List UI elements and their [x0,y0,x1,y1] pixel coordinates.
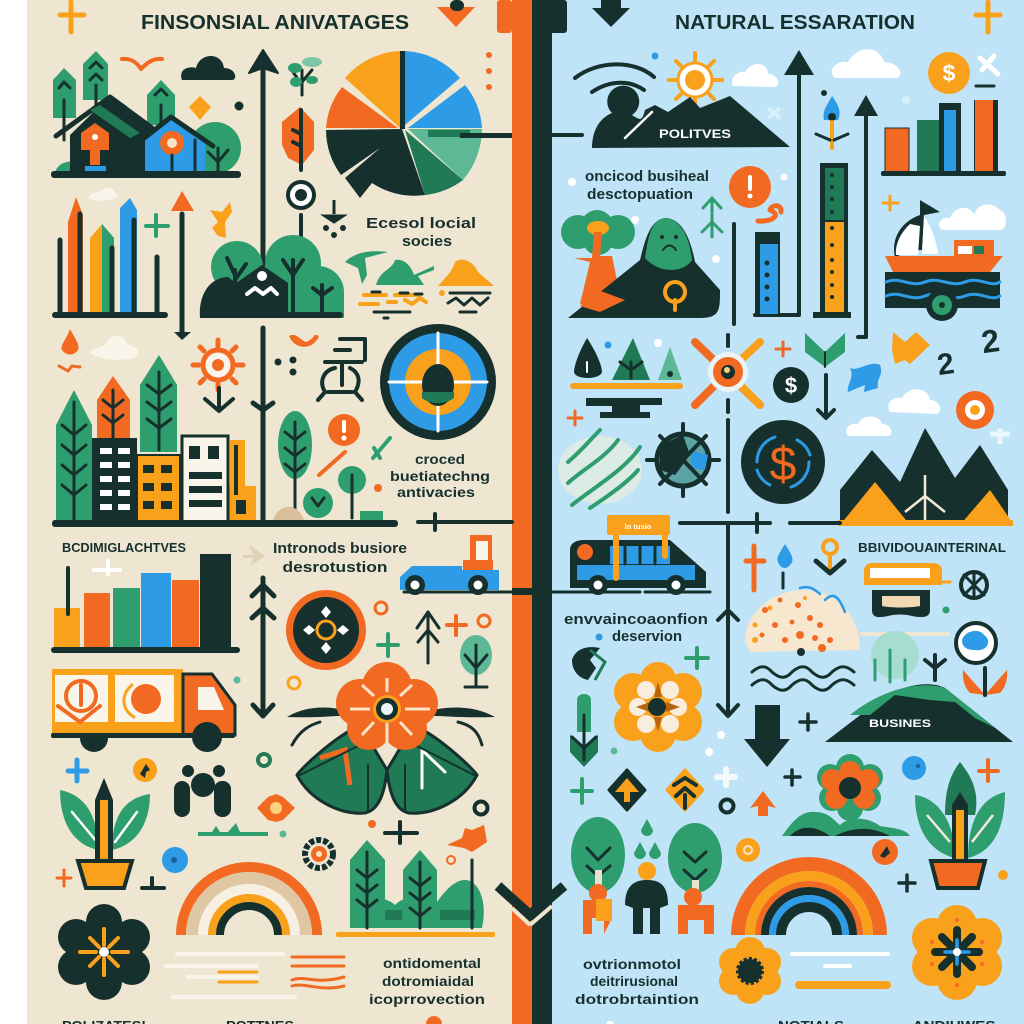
icon: percent coin [773,367,809,403]
icon: amber plus small [883,196,898,210]
dots [610,731,725,756]
text: envvaincoaonfion deservion: deservion [612,628,682,645]
icon: dark plus [800,714,816,730]
icon: mountains turbine [838,428,1014,526]
text: ecesol locial socies: Ecesol locial [366,215,476,232]
dot [652,52,658,60]
arrow: vertical double [252,578,274,716]
icon: orange plus [776,342,790,356]
icon: green grass [198,823,268,836]
icon: ghost tree [871,631,919,682]
icon: dollar coin [928,52,970,94]
icon: small trees [273,466,383,520]
title: natural essaration: NATURAL ESSARATION [675,12,915,34]
icon: orange coin [872,839,898,865]
central divider [497,0,567,1024]
icon: green chevron leaves [805,333,845,367]
icon: delivery truck [51,669,235,752]
arrow: orange top [437,0,475,27]
text: croced buetiatechng antivacies: croced [415,451,465,467]
icon: goggles [864,563,950,617]
dot [280,830,286,838]
dot [780,174,788,180]
arrow: tall up [755,50,814,315]
text: croced buetiatechng antivacies: antivacies [397,484,475,500]
icon: green tree [460,635,492,687]
text: ovtrionmotol deitrirusional dotrobrtaintion: deitrirusional [590,973,678,989]
icon: dark sprout [925,655,945,680]
icon: towers [755,163,851,318]
text: envvaincoaonfion deservion: envvaincoaonfion [564,611,708,628]
text: ontidomental detromiaidal icoprovection [369,955,485,1007]
icon: dome with dots [745,587,950,690]
panel: houses and trees [51,51,241,178]
icon: green ring [258,754,270,766]
dot [606,1021,614,1024]
icon: white cross [980,56,998,74]
icon: number twos: 2 [935,347,956,382]
arrow: second up [854,95,878,337]
arrow: long divider line [253,328,273,520]
icon: potted plant left [60,778,150,888]
icon: green plus [686,648,708,668]
icon: green arrow leaf [570,694,598,767]
line [732,224,736,324]
icon: dollar coin: $ [943,60,956,86]
icon: alert circle [328,414,360,446]
arrow: green up [702,198,722,237]
dot [998,870,1008,880]
icon: magnifier tulip [956,623,1007,695]
panel: forest hut [200,235,344,318]
arrow: long up [249,50,278,265]
dot [942,606,950,614]
icon: number twos [935,322,1002,382]
icon: orange x sun [695,335,760,412]
icon: wheel [961,572,987,598]
icon: mountain business: BUSINES [869,718,931,730]
dots [274,356,296,376]
icon: globe target [380,324,496,440]
icon: mountain business [825,684,1013,742]
icon: sailboat on water [885,200,1006,321]
icons: land and water strip [345,251,494,318]
text: ovtrionmotol deitrirusional dotrobrtaintion: ovtrionmotol [583,956,681,972]
dot [568,178,576,186]
icon: blue circle [902,756,926,780]
icon: white cloud [90,335,138,360]
pie chart [326,51,512,198]
icon: dollar circle: $ [770,438,796,491]
icon: orange leaf [282,107,314,170]
icon: orange stroke [319,452,345,475]
icon: target [288,182,314,236]
icon: rainbow left [181,867,317,935]
icon: blue truck [400,535,640,595]
icon: green y sprout [373,438,390,458]
text: envvaincoaonfion deservion [564,611,708,645]
icon: white plus flower [717,769,735,785]
dot [902,96,910,104]
text: croced buetiatechng antivacies [390,451,490,500]
dot [368,820,376,828]
icon: amber cross [892,332,930,364]
icon: number twos: 2 [979,322,1002,360]
icon: blue splash [848,364,881,392]
bar chart: colored bars [51,554,240,653]
icon: dollar circle [741,420,825,504]
title: financial advantages: FINSONSIAL ANIVATAGES [141,12,409,34]
arrow: big down [744,705,790,767]
panel: forest row [336,825,495,937]
panel: city and pines [52,355,398,527]
icon: orange bird small [59,366,80,371]
icon: green plus [572,779,592,803]
icon: orange bird [122,59,162,69]
line [726,420,730,512]
icon: orange cross [746,546,764,590]
icon: tan arrow [243,544,265,566]
icon: orange drop [62,329,79,354]
icon: triangle trees [570,338,683,418]
icon: orange plus [568,411,582,425]
icon: white cross small [768,108,780,118]
text: intronods busiore desrotustion: Intronods busiore [273,540,407,557]
icon: orange flower small [257,794,295,822]
text: ovtrionmotol deitrirusional dotrobrtaintion [575,956,699,1007]
icon: dark cloud [181,56,235,80]
icon: amber plus right [976,2,1000,32]
icon: potted plant right [915,762,1005,888]
icon: ring dark [474,802,488,814]
icon: orange squiggle [758,206,781,221]
arrow: horizontal right lines [680,514,840,532]
icon: rainbow right [738,864,880,935]
text: ovtrionmotol deitrirusional dotrobrtaintion: dotrobrtaintion [575,991,699,1007]
text: ecesol locial socies: socies [402,233,452,250]
icon: dark flower [58,904,150,1000]
icon: amber coin [736,838,760,862]
icon: dark pine [417,612,439,663]
arrow: vertical down with cross [718,525,738,716]
text: oncicod busiheal desctopuation: oncicod busiheal [585,168,709,185]
icon: small droplets [323,200,346,238]
dot [234,676,240,684]
text: ontidomental detromiaidal icoprovection: icoprrovection [369,991,485,1007]
rings [288,602,490,689]
dots column [486,52,492,90]
icon: amber plus left [60,2,84,32]
icon: signal arcs [575,64,654,92]
icon: sun [669,53,722,106]
icon: green waves map [558,430,642,508]
icon: cloud large [832,49,900,78]
icon: white plus [990,428,1010,444]
icon: amber diamond [667,770,703,810]
icon: percent coin: $ [785,373,797,398]
icon: green plus [378,634,398,656]
icon: crossed globe [647,424,719,496]
icon: tree and mountain face [561,210,720,318]
icon: dark plus [385,822,417,843]
icon: amber flower [614,662,702,752]
mountain with text: POLITVES [659,127,731,141]
icon: blue plus [68,760,87,781]
icon: orange arrow [750,791,776,816]
icon: orange plus [447,616,466,635]
icon: dark diamond [609,770,645,810]
icon: wheel outline [318,339,365,400]
dots [604,339,662,348]
dot [234,102,244,110]
icon: amber diamond [189,96,211,120]
icon: orange plus small [57,870,71,886]
bars: white and amber [790,952,891,989]
icon: green star plus [146,215,168,236]
icon: amber flower dark core [719,937,781,1004]
icon: flower and leaves [287,662,495,813]
icon: amber splat [210,202,232,238]
icon: gear [305,840,333,868]
text: croced buetiatechng antivacies: buetiatechng [390,468,490,484]
arrow: orange up dark down [171,191,194,340]
icon: dark ring [720,800,734,812]
icon: blue drop [777,544,793,588]
arrow: horizontal stub [552,133,582,137]
arrow: small down [818,375,834,418]
icon: cloud [732,64,778,87]
heading: environmental: BBIVIDOUAINTERINAL [858,540,1006,555]
dot [374,484,382,492]
icon: people and trees [571,817,722,934]
icon: blue flame plant [816,90,848,148]
text: intronods busiore desrotustion: desrotustion [282,559,388,576]
icon: alert [729,166,771,208]
icon: bus [570,515,710,595]
icon: dark plus [785,770,800,785]
mountain with text [592,86,790,148]
bar chart: book bars [881,86,1006,176]
dot [596,634,602,640]
text: oncicod busiheal desctopuation [585,168,709,203]
icon: blue circle [162,847,188,873]
icon: flower on mound [782,754,910,836]
arrow: horizontal cross [418,514,512,530]
text: ontidomental detromiaidal icoprovection: dotromiaidal [382,973,474,989]
icon: amber badge [133,758,157,782]
arrow: dark top [592,0,630,27]
dots [631,216,720,263]
icon: amber flower blue core [912,905,1002,1000]
text: ecesol locial socies [366,215,476,250]
icon: dark t mark [142,878,164,888]
icon: amber pin [816,540,844,573]
bar chart: arrows [52,187,168,318]
icon: pine tree [278,411,312,510]
icon: people group [174,765,231,817]
heading: economic objectives: BCDIMIGLACHTVES [62,541,186,555]
icon: bus: ln tusio [625,522,652,531]
text: intronods busiore desrotustion [273,540,407,576]
icon: orange sun [193,340,243,411]
text: oncicod busiheal desctopuation: desctopuation [587,186,693,203]
icon: dark plus [899,875,915,891]
lines: white and amber bars [166,954,344,997]
text: ontidomental detromiaidal icoprovection: ontidomental [383,955,481,971]
icon: orange leaf blob [289,335,319,347]
icon: orange ring [956,391,994,429]
dot [426,1016,442,1024]
icon: compass circle [286,590,366,670]
icon: orange plus [979,760,998,781]
icon: small globe [572,647,605,680]
icons: white clouds [846,389,940,436]
icon: sprout [288,57,322,95]
